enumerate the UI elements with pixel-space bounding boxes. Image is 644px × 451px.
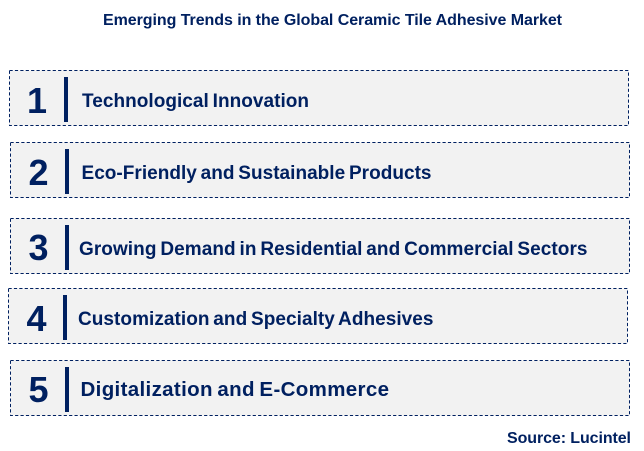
divider bar 3 <box>65 225 69 270</box>
divider bar 1 <box>64 77 68 122</box>
number 5: 5 <box>28 369 49 410</box>
label: trend 2: Eco-Friendly and Sustainable Products <box>82 163 432 184</box>
panel: trend 4 <box>8 288 628 344</box>
panel: trend 2 <box>10 142 630 198</box>
title: Emerging Trends in the Global Ceramic Tile Adhesive Market <box>103 12 563 29</box>
number 3: 3 <box>28 227 49 268</box>
source note: Source: Lucintel <box>507 430 631 447</box>
label: trend 5: Digitalization and E-Commerce <box>80 378 389 401</box>
label: trend 4: Customization and Specialty Adhesives <box>78 309 434 330</box>
number 2: 2 <box>28 152 49 193</box>
number 1: 1 <box>27 80 47 121</box>
number 4: 4 <box>26 298 47 339</box>
divider bar 5 <box>65 367 69 412</box>
panel: trend 5 <box>10 360 630 416</box>
divider bar 2 <box>65 149 69 194</box>
label: trend 3: Growing Demand in Residential and Commercial Sectors <box>79 239 588 260</box>
divider bar 4 <box>63 295 67 340</box>
panel: trend 3 <box>10 218 630 274</box>
panel: trend 1 <box>10 70 628 126</box>
label: trend 1: Technological Innovation <box>82 91 309 112</box>
